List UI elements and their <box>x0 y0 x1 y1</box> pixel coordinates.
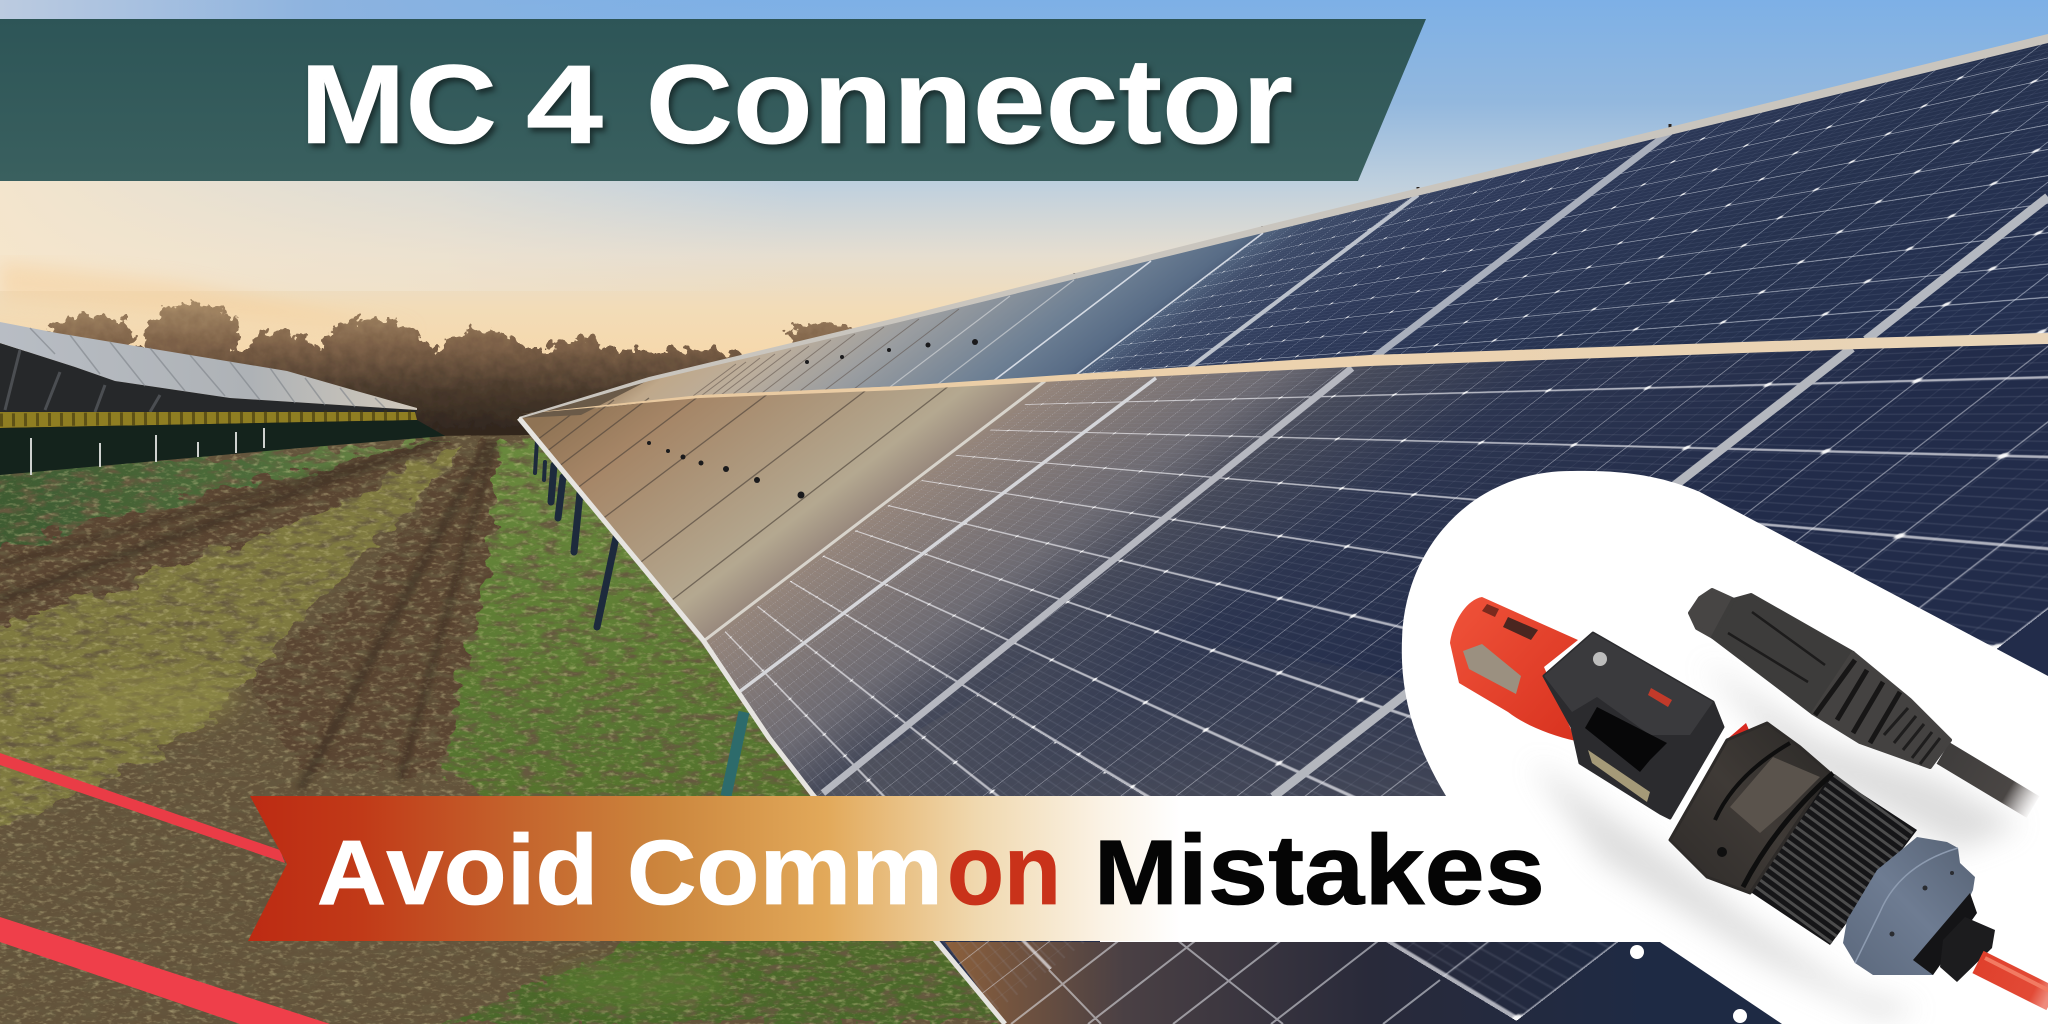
subtitle text: Mistakes <box>1094 814 1545 925</box>
wheel track left <box>0 437 458 640</box>
mid grass band <box>0 440 470 840</box>
plug upper body <box>1690 590 1950 767</box>
connector photo <box>1450 590 2048 1018</box>
tint of panels under ribbon <box>945 942 1782 1024</box>
upper row far panel dividers <box>693 132 2048 396</box>
front collar <box>1670 723 1833 893</box>
connector shadows <box>1530 660 2020 1018</box>
horizontal mounting rail <box>520 333 2048 414</box>
red cable <box>1978 958 2048 999</box>
top frame edge <box>519 34 2048 419</box>
cell lines below ribbon <box>1011 853 1440 1024</box>
mounting clamps <box>647 124 1670 498</box>
wheel track centre <box>250 440 505 770</box>
solar cells lower row grid <box>710 344 2048 1020</box>
white connector panel <box>1100 471 2048 1024</box>
far end strip <box>519 380 649 418</box>
subtitle text <box>317 814 1545 925</box>
coupling body <box>1544 633 1723 818</box>
tint of panels above ribbon <box>810 620 1446 796</box>
red nose <box>1450 597 1578 741</box>
lower row panel dividers <box>537 348 1852 797</box>
grass texture <box>0 438 994 1024</box>
subtitle text: Avoid Comm <box>317 814 943 925</box>
distant tree line <box>0 302 858 440</box>
subtitle ribbon <box>248 796 1545 941</box>
grey cable <box>1943 753 2033 807</box>
title text: MC <box>300 42 497 167</box>
subtitle text: on <box>947 814 1061 925</box>
left green strip <box>0 437 450 548</box>
red accent lines <box>0 753 330 1024</box>
grey flange <box>1843 837 1975 975</box>
bottom frame edge <box>519 418 1005 1024</box>
panel corner bright spots <box>1630 945 1747 1023</box>
title banner <box>0 19 1426 181</box>
left solar row <box>0 322 445 475</box>
title text: 4 <box>526 42 603 167</box>
solar array base shading <box>519 38 2048 1024</box>
rear gland <box>1913 893 1995 982</box>
title text <box>300 33 1293 169</box>
red seal ring <box>1725 723 1749 748</box>
field ground <box>0 435 1002 1024</box>
ribbed nut sleeve <box>1743 747 1917 945</box>
right grass <box>440 438 998 1024</box>
array support posts <box>535 440 744 796</box>
furrow streaks <box>0 440 495 790</box>
grass patches <box>60 670 730 1009</box>
solar cells upper row grid <box>1082 44 2048 374</box>
title text: Connector <box>646 33 1293 169</box>
